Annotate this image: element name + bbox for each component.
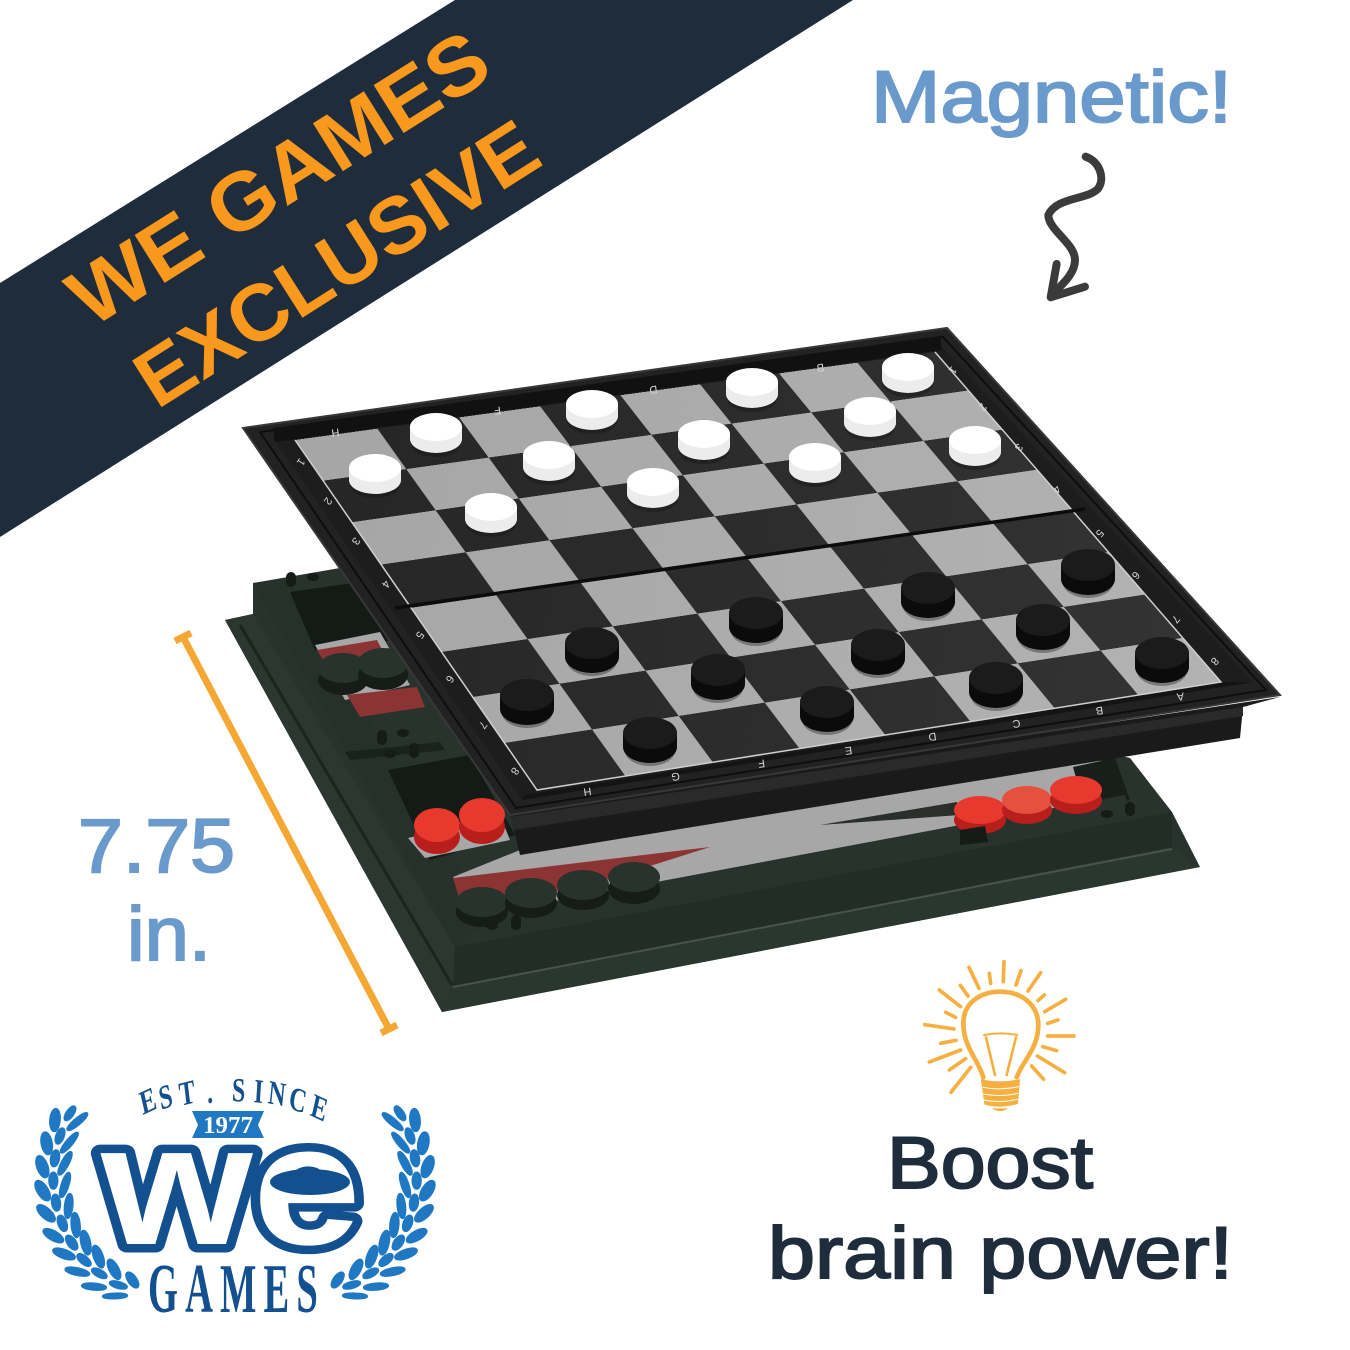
- board labels: 2: [321, 495, 334, 507]
- board edge lines: [295, 352, 1221, 790]
- banner text: WE GAMES: WE GAMES: [52, 13, 505, 344]
- logo: WE Games: [33, 1072, 437, 1328]
- ribbon: 1977: [192, 1111, 264, 1139]
- red backgammon checkers: [414, 776, 1102, 854]
- board labels: 5: [1093, 527, 1106, 539]
- size label: 7.75 in.: 7.75: [78, 804, 235, 889]
- heading: Magnetic!: Magnetic!: [871, 57, 1232, 138]
- banner: [0, 0, 853, 537]
- board labels: 8: [508, 765, 521, 777]
- board labels: B: [816, 361, 825, 373]
- wordmark: we: we: [100, 1089, 361, 1281]
- board labels: F: [493, 404, 502, 416]
- board labels: 4: [1050, 483, 1063, 495]
- board labels: C: [1012, 716, 1021, 729]
- board labels: 8: [1208, 655, 1221, 667]
- board labels: A: [1175, 690, 1185, 703]
- board labels: 7: [1169, 613, 1182, 625]
- board labels: 6: [443, 673, 456, 685]
- left tray pockets and points: [290, 582, 515, 860]
- board fold line: [395, 509, 1085, 608]
- board labels: D: [928, 729, 937, 742]
- text: Boost brain power!: brain power!: [768, 1213, 1233, 1294]
- panel: top checkers board frame: [243, 328, 1280, 855]
- board labels: 7: [476, 719, 489, 731]
- board labels: E: [571, 393, 580, 405]
- board labels: F: [757, 757, 766, 769]
- board labels: A: [903, 354, 913, 367]
- board labels: 1: [946, 364, 959, 376]
- backgammon playing surface: [453, 758, 1130, 935]
- board labels: C: [726, 372, 735, 385]
- laurel wreath right: [329, 1105, 437, 1299]
- checkerboard squares: [295, 352, 1221, 790]
- board labels: G: [412, 414, 422, 428]
- panel: lower backgammon board: [225, 568, 1200, 1012]
- text: Boost brain power!: Boost: [887, 1123, 1093, 1204]
- dimension line: [175, 633, 397, 1033]
- icon: light bulb: [925, 962, 1074, 1110]
- board labels: H: [583, 784, 592, 797]
- white checkers: [349, 353, 1001, 537]
- board labels: 2: [976, 401, 989, 413]
- text: GAMES: GAMES: [148, 1251, 325, 1328]
- dark backgammon checkers: [318, 648, 660, 927]
- board labels: 1: [294, 456, 307, 468]
- board labels: D: [649, 382, 658, 395]
- board labels: 4: [379, 578, 392, 590]
- ribbon: 1977: 1977: [203, 1113, 253, 1139]
- board labels: G: [670, 769, 680, 783]
- icon: squiggly arrow: [1048, 157, 1101, 297]
- size label: 7.75 in.: in.: [127, 892, 211, 977]
- board labels: E: [844, 744, 853, 756]
- black checkers: [500, 549, 1189, 766]
- board labels: 5: [413, 629, 426, 641]
- board labels: 3: [349, 535, 362, 547]
- text: EST. SINCE: EST. SINCE: [137, 1072, 331, 1130]
- text: Boost brain power!: [768, 1123, 1233, 1294]
- banner text: EXCLUSIVE: EXCLUSIVE: [118, 103, 554, 424]
- laurel wreath left: [33, 1105, 141, 1299]
- board labels: 6: [1129, 569, 1142, 581]
- board labels: [294, 354, 1221, 797]
- board labels: B: [1095, 704, 1104, 716]
- pegs and holes: [286, 572, 1135, 930]
- board labels: 3: [1012, 441, 1025, 453]
- board labels: H: [331, 425, 340, 438]
- size label: 7.75 in.: [78, 804, 235, 977]
